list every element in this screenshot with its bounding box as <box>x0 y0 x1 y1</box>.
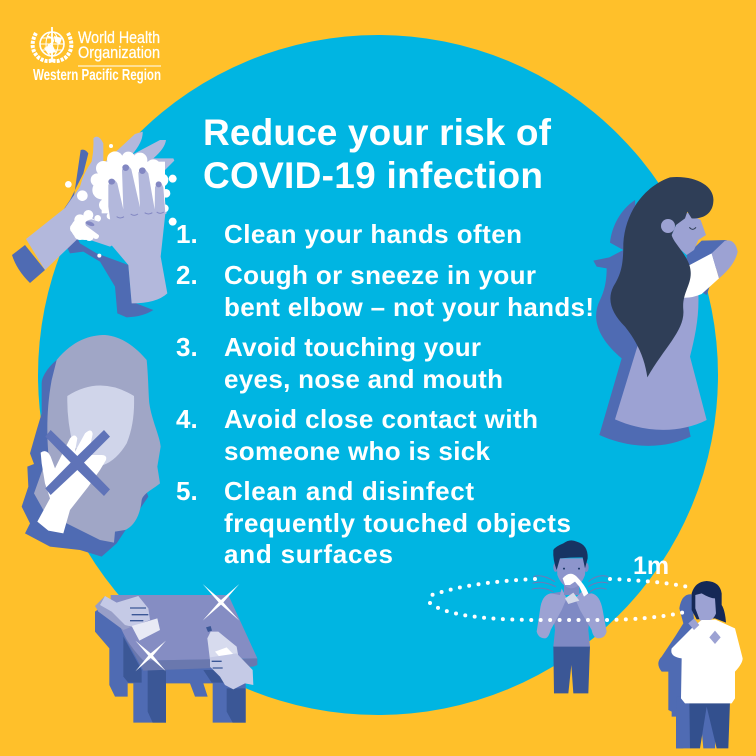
title: Reduce your risk of <box>203 112 552 153</box>
icon: WHO emblem <box>33 27 71 62</box>
numbered list: 5. <box>176 476 198 506</box>
title <box>203 112 552 196</box>
icon: no touching face <box>22 335 161 557</box>
dotted one-metre ring <box>430 579 688 620</box>
icon: washing hands <box>12 132 177 317</box>
foam on fingers <box>91 151 170 219</box>
numbered list: bent elbow – not your hands! <box>224 292 594 322</box>
numbered list: and surfaces <box>224 539 393 569</box>
numbered list: eyes, nose and mouth <box>224 364 503 394</box>
numbered list: Cough or sneeze in your <box>224 260 536 290</box>
soap bubbles <box>65 144 177 258</box>
icon: person keeping distance <box>658 581 743 748</box>
numbered list: Avoid close contact with <box>224 404 538 434</box>
numbered list: 1. <box>176 219 198 249</box>
icon: cleaning table <box>95 584 257 723</box>
numbered list: Avoid touching your <box>224 332 481 362</box>
numbered list: someone who is sick <box>224 436 491 466</box>
icon: woman sneezing into elbow <box>593 177 738 446</box>
sparkles <box>203 584 239 621</box>
numbered list: Clean and disinfect <box>224 476 474 506</box>
numbered list: Clean your hands often <box>224 219 522 249</box>
logo text: World Health <box>78 28 160 47</box>
numbered list <box>176 219 594 569</box>
label: 1m: 1m <box>633 552 669 580</box>
numbered list: 4. <box>176 404 198 434</box>
numbered list: 3. <box>176 332 198 362</box>
WHO logo: Western Pacific Region <box>33 67 161 84</box>
WHO logo: Organization <box>78 43 160 62</box>
foam on thumb <box>70 210 101 241</box>
WHO logo <box>33 27 161 84</box>
icon: person coughing <box>532 540 608 693</box>
numbered list: frequently touched objects <box>224 508 571 538</box>
numbered list: 2. <box>176 260 198 290</box>
title: COVID-19 infection <box>203 155 543 196</box>
